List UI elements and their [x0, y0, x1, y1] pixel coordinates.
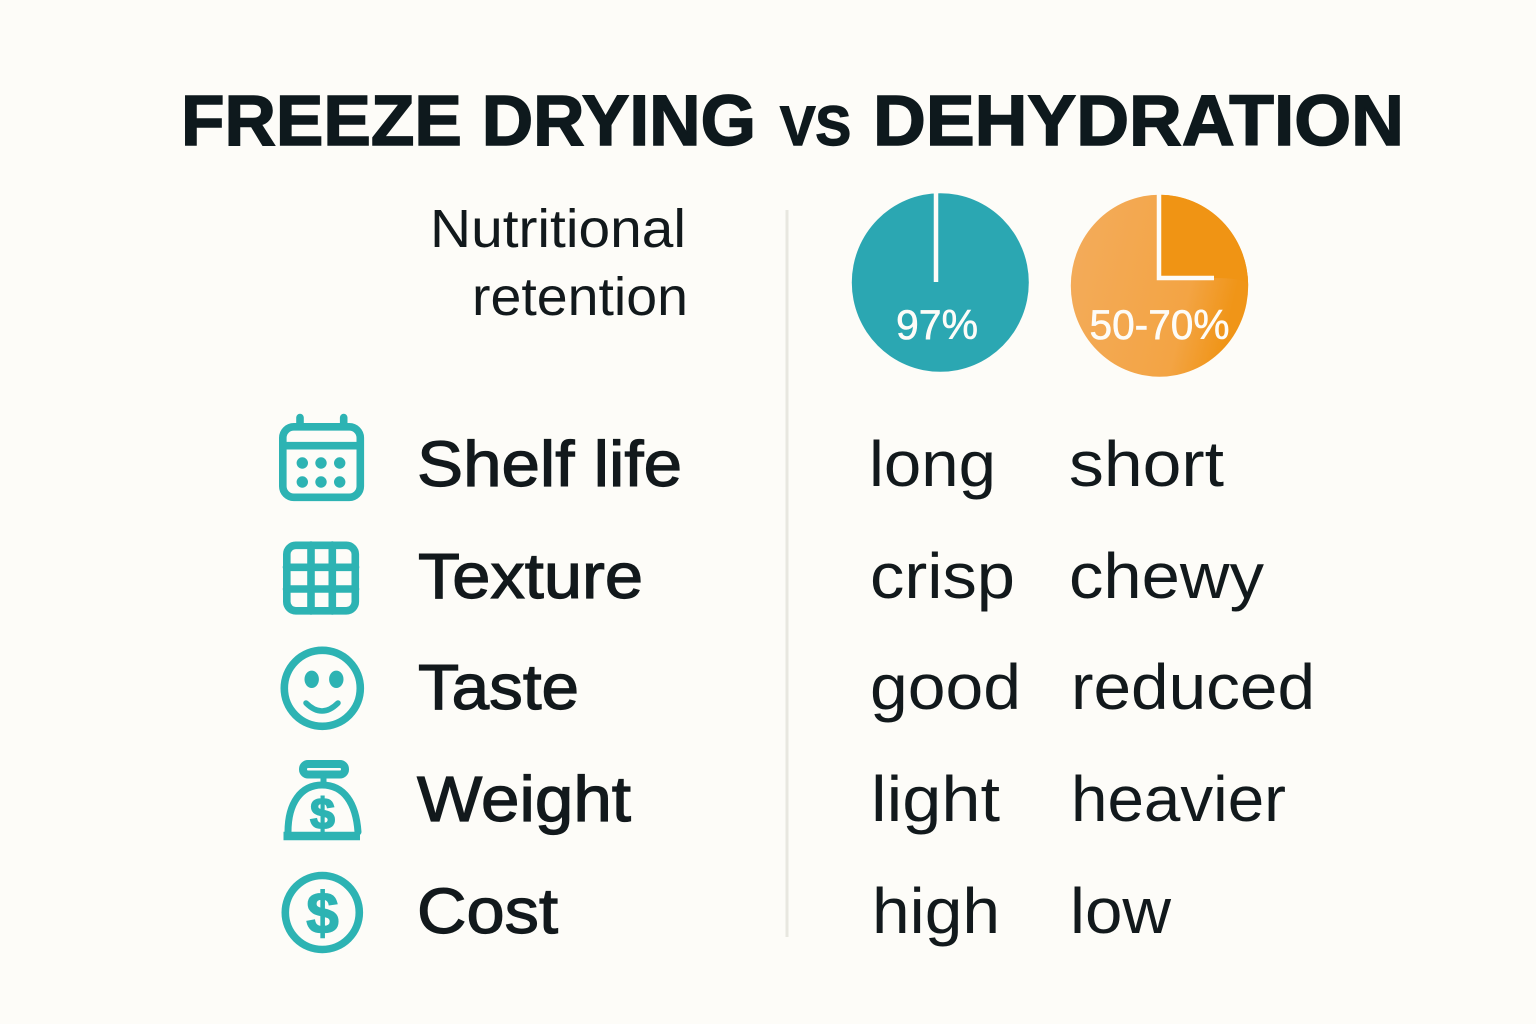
value: freeze drying taste: good — [870, 651, 1021, 723]
value: freeze drying cost: high — [872, 875, 1000, 947]
heading: nutritional retention: Nutritional — [430, 199, 686, 259]
heading: nutritional retention — [430, 199, 688, 327]
title: FREEZE DRYING — [181, 82, 756, 161]
value: freeze drying shelf life: long — [869, 428, 996, 500]
pie chart: freeze drying 97% — [852, 193, 1029, 372]
value: freeze drying weight: light — [871, 763, 1000, 835]
icon: dollar coin: $ — [306, 881, 339, 946]
label: weight: Weight — [417, 763, 631, 835]
pie chart: dehydration 50-70% — [1071, 194, 1248, 377]
icon: weight scale: $ — [310, 790, 335, 839]
label: cost: Cost — [417, 875, 558, 947]
pie chart: freeze drying 97%: 97% — [896, 301, 978, 348]
value: dehydration weight: heavier — [1071, 763, 1286, 835]
value: dehydration texture: chewy — [1069, 540, 1264, 612]
value: dehydration taste: reduced — [1071, 651, 1315, 723]
label: shelf life: Shelf life — [417, 428, 682, 500]
label: taste: Taste — [418, 651, 579, 723]
heading: nutritional retention: retention — [472, 267, 688, 327]
value: dehydration cost: low — [1070, 875, 1172, 947]
icon: calendar — [283, 418, 360, 497]
icon: smiley face — [284, 650, 360, 726]
title: DEHYDRATION — [873, 82, 1404, 161]
value: freeze drying texture: crisp — [870, 540, 1015, 612]
icon: texture grid — [286, 545, 356, 611]
value: dehydration shelf life: short — [1069, 428, 1224, 500]
title — [181, 82, 1404, 161]
title: VS — [780, 94, 851, 157]
icon: weight scale — [284, 764, 360, 839]
icon: dollar coin — [285, 876, 359, 950]
pie chart: dehydration 50-70%: 50-70% — [1090, 301, 1230, 348]
label: texture: Texture — [418, 540, 643, 612]
